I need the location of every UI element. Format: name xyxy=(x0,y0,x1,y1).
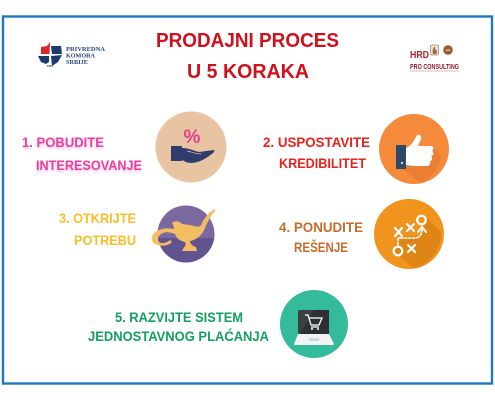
icon: hand with percent xyxy=(156,112,226,182)
icon: thumbs up xyxy=(379,114,449,184)
step 1 label: 1. POBUDITE xyxy=(22,135,104,150)
icon: magic lamp xyxy=(152,206,215,262)
step 1 label: INTERESOVANJE xyxy=(36,158,142,173)
icon: game plan xyxy=(374,199,444,269)
step 3 label xyxy=(59,211,136,248)
step 5 label xyxy=(88,310,269,344)
logo: Privredna Komora Srbije: 1857 xyxy=(47,64,54,68)
step 5 label: JEDNOSTAVNOG PLAĆANJA xyxy=(88,329,269,344)
step 2 label: 2. USPOSTAVITE xyxy=(263,135,370,150)
step 4 label xyxy=(279,220,363,255)
logo: Privredna Komora Srbije: KOMORA xyxy=(66,52,96,60)
logo: HRD Pro Consulting: HRD xyxy=(410,50,429,61)
step 2 label xyxy=(263,135,370,171)
logo: HRD Pro Consulting: PRO CONSULTING xyxy=(410,64,459,71)
icon: laptop with cart xyxy=(280,290,348,358)
title: PRODAJNI PROCES xyxy=(156,29,339,52)
step 2 label: KREDIBILITET xyxy=(279,156,367,171)
step 5 label: 5. RAZVIJTE SISTEM xyxy=(115,310,243,325)
step 3 label: POTREBU xyxy=(74,233,136,248)
step 1 label xyxy=(22,135,142,173)
step 4 label: 4. PONUDITE xyxy=(279,220,363,235)
icon: hand with percent: % xyxy=(184,127,201,148)
logo: Privredna Komora Srbije xyxy=(38,42,106,68)
logo: Privredna Komora Srbije: PRIVREDNA xyxy=(66,46,106,53)
step 3 label: 3. OTKRIJTE xyxy=(59,211,136,226)
title xyxy=(156,29,339,83)
logo: Privredna Komora Srbije: SRBIJE xyxy=(66,59,88,66)
logo: HRD Pro Consulting xyxy=(410,45,459,72)
step 4 label: REŠENJE xyxy=(294,240,348,255)
title: U 5 KORAKA xyxy=(187,60,309,83)
